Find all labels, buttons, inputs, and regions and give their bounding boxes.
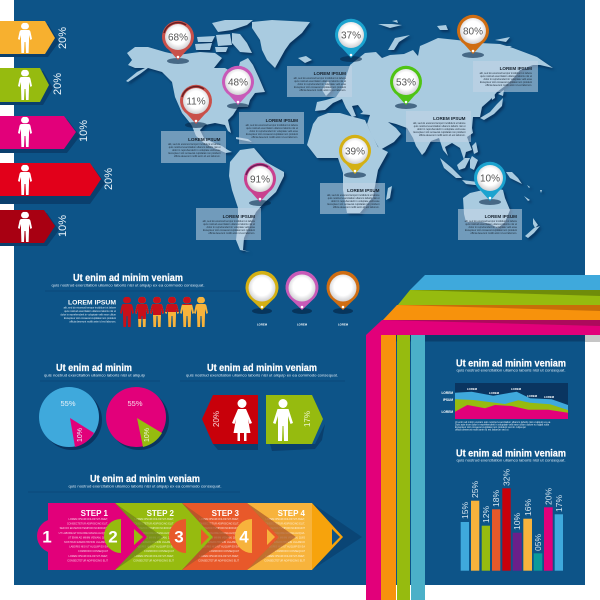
- pie: magenta: [106, 387, 169, 450]
- panel: steps: [28, 474, 362, 570]
- step 4: [247, 503, 362, 570]
- step 2: LOREM IPSUM DOLOR SIT AMET,: [134, 555, 174, 558]
- North America: [126, 47, 265, 153]
- pie: blue: 55%: [60, 399, 76, 408]
- New Zealand: [525, 218, 540, 238]
- ribbon: orange: [381, 305, 600, 600]
- arrow: green 20%: 20%: [52, 73, 64, 95]
- Southeast Asia islands: [440, 142, 484, 186]
- bars: 25%: [470, 481, 480, 498]
- pin: 11%: [180, 85, 212, 128]
- label box: South America: [196, 208, 261, 240]
- chart caption: [455, 421, 551, 432]
- step 1: UT LABORE ET DOLORE MAGNA ALIQUA.: [59, 532, 108, 535]
- heading: Ut enim ad minim veniam: [207, 363, 317, 374]
- step 3: LABORIS NISI UT ALIQUIP EX EA: [200, 546, 239, 549]
- label box: Australia: LOREM IPSUM: [485, 214, 517, 219]
- label box: South America: dolor in reprehenderit in voluptate velit esse: [207, 226, 256, 229]
- Australia: [463, 186, 510, 228]
- tag: male: [266, 395, 325, 451]
- Madagascar: [386, 186, 392, 200]
- text block: officia deserunt mollit anim id est laborum.: [69, 320, 116, 324]
- heading: quis nostrud exercitation ullamco laboris nisi ut consequat.: [456, 368, 566, 372]
- label box: Africa: alit, sed do eiusmod tempor incididunt ut labore: [327, 194, 380, 197]
- heading: quis nostrud exercitation ullamco laboris nisi ut aliquip ex ea commodo consequat.: [186, 374, 338, 378]
- step 3: SED DO EIUSMOD TEMPOR INCIDIDUNT: [191, 527, 239, 530]
- step 3: CONSECTETUR ADIPISICING ELIT: [198, 559, 239, 562]
- chart axis labels: LOREM: [441, 410, 453, 414]
- label box: Africa: officia deserunt mollit anim id est laborum.: [333, 206, 380, 209]
- pin: 39%: [339, 135, 371, 178]
- heading: [52, 273, 205, 288]
- chart caption: Duis aute irure dolor in reprehenderit in voluptate velit esse cillum dolore eu fugiat nulla: [455, 424, 550, 426]
- label box: Russia: dolor in reprehenderit in voluptate velit esse: [484, 78, 533, 81]
- bars: [460, 469, 564, 571]
- label box: Atlantic: quis nostrud exercitation ullamco laboris nisi ut: [246, 127, 298, 130]
- step 3: COMMODO CONSEQUAT: [209, 550, 239, 553]
- label box: Russia: officia deserunt mollit anim id est laborum.: [485, 84, 532, 87]
- panel: gender tags: [180, 363, 345, 451]
- heading: Ut enim ad minim veniam: [456, 448, 566, 460]
- step 4: LABORIS NISI UT ALIQUIP EX EA: [266, 546, 305, 549]
- heading: Ut enim ad minim veniam: [73, 273, 183, 284]
- panel: empty pins: [246, 271, 360, 326]
- label box: Atlantic: [239, 112, 304, 144]
- label box: Australia: dolor in reprehenderit in voluptate velit esse: [469, 226, 518, 229]
- text block: [61, 300, 117, 324]
- label box: Atlantic: LOREM IPSUM: [266, 118, 298, 123]
- arrow: dark red 10%: 10%: [57, 215, 69, 237]
- step 4: CONSECTETUR ADIPISICING ELIT,: [264, 523, 305, 526]
- label box: Europe: quis nostrud exercitation ullamco laboris nisi ut: [294, 80, 346, 83]
- label box: South America: alit, sed do eiusmod tempor incididunt ut labore: [203, 220, 256, 223]
- label box: North America: alit, sed do eiusmod tempor incididunt ut labore: [168, 143, 221, 146]
- bars: 20%: [544, 488, 554, 505]
- pin: pink: LOREM: [297, 322, 308, 326]
- label box: South America: Excepteur sint occaecat cupidatat non proident: [203, 229, 255, 232]
- label box: Australia: Excepteur sint occaecat cupidatat non proident: [465, 229, 517, 232]
- pin: 68%: 68%: [168, 32, 188, 44]
- pin: orange: LOREM: [338, 322, 349, 326]
- area chart: LOREM: [527, 394, 538, 398]
- label box: Asia: LOREM IPSUM: [433, 116, 466, 121]
- label box: Africa: Excepteur sint occaecat cupidatat non proident: [328, 203, 380, 206]
- label box: North America: [161, 131, 226, 163]
- label box: Russia: Excepteur sint occaecat cupidatat non proident: [480, 81, 532, 84]
- pin: 48%: [222, 66, 254, 109]
- ribbons: [366, 275, 600, 600]
- pin: 91%: 91%: [250, 174, 270, 186]
- Baffin Island: [232, 33, 252, 53]
- step 3: LOREM IPSUM DOLOR SIT AMET,: [199, 555, 239, 558]
- step 4: NOSTRUD EXERCITATION ULLAMCO: [261, 541, 305, 544]
- number 3: 3: [174, 528, 184, 546]
- step 1: SED DO EIUSMOD TEMPOR INCIDIDUNT: [60, 527, 108, 530]
- pie: magenta: 55%: [127, 399, 143, 408]
- map label boxes: [161, 61, 538, 240]
- pin: 39%: 39%: [345, 146, 365, 158]
- label box: Europe: LOREM IPSUM: [314, 71, 346, 76]
- label box: South America: officia deserunt mollit anim id est laborum.: [208, 232, 255, 235]
- Arctic island: [216, 34, 232, 46]
- heading: quis nostrud exercitation ullamco laboris nisi ut consequat.: [456, 458, 566, 462]
- label box: Asia: [406, 111, 471, 142]
- grey shadow on white: [585, 335, 600, 342]
- text block: alit, sed do eiusmod tempor incididunt ut labore: [64, 306, 117, 310]
- arrow: orange 20%: [0, 21, 69, 57]
- area chart: LOREM: [489, 391, 500, 395]
- number 4: [235, 519, 252, 553]
- people icons: [120, 297, 208, 327]
- chart caption: Ut enim ad minim veniam quis nostrud exercitation ullamco laboris nisi ut aliquip ex ea: [455, 421, 551, 424]
- number 2: 2: [108, 528, 118, 546]
- step 3: UT ENIM AD MINIM VENIAM, QUIS: [199, 536, 239, 539]
- step 4: LOREM IPSUM DOLOR SIT AMET,: [265, 555, 305, 558]
- pin: 37%: [335, 19, 367, 62]
- heading: [44, 363, 145, 378]
- chart caption: officia deserunt mollit anim id est laborum sed ut: [455, 428, 509, 432]
- text block: LOREM IPSUM: [68, 300, 116, 306]
- Novaya Zemlya: [388, 35, 410, 50]
- Arctic island: [197, 36, 215, 42]
- label box: Australia: alit, sed do eiusmod tempor incididunt ut labore: [465, 220, 518, 223]
- pie: magenta: 10%: [144, 428, 151, 442]
- arrow: orange 20%: 20%: [57, 27, 69, 49]
- label box: Russia: [473, 61, 538, 92]
- step 4: SED DO EIUSMOD TEMPOR INCIDIDUNT: [257, 527, 305, 530]
- label box: South America: LOREM IPSUM: [223, 214, 255, 219]
- step 3: CONSECTETUR ADIPISICING ELIT,: [198, 523, 239, 526]
- step 2: LABORIS NISI UT ALIQUIP EX EA: [135, 546, 174, 549]
- shadow under ribbon: [385, 335, 585, 342]
- label box: Asia: quis nostrud exercitation ullamco laboris nisi ut: [414, 125, 466, 128]
- Ellesmere Island: [212, 20, 253, 32]
- label box: Asia: dolor in reprehenderit in voluptate velit esse: [417, 128, 466, 131]
- step 4: STEP 4: [278, 509, 306, 518]
- label box: Russia: alit, sed do eiusmod tempor incididunt ut labore: [480, 72, 533, 75]
- pin: 11%: 11%: [186, 96, 206, 108]
- label box: North America: Excepteur sint occaecat cupidatat non proident: [169, 152, 221, 155]
- Cuba: [236, 137, 252, 142]
- step 2: CONSECTETUR ADIPISICING ELIT,: [133, 523, 174, 526]
- tag: male: 17%: [303, 411, 312, 427]
- bars: 16%: [523, 499, 533, 516]
- ribbon: blue: [410, 275, 600, 600]
- step 1: STEP 1: [81, 509, 109, 518]
- pin: 37%: 37%: [341, 30, 361, 42]
- text block: dolor in reprehenderit in voluptate velit esse cillum: [61, 314, 116, 316]
- pie: blue: [39, 387, 102, 450]
- ribbon: green: [397, 290, 600, 600]
- pin: 53%: 53%: [396, 78, 416, 88]
- step 1: COMMODO CONSEQUAT: [78, 550, 108, 553]
- label box: Europe: dolor in reprehenderit in voluptate velit esse: [298, 83, 347, 86]
- panel: pie charts: [39, 363, 169, 450]
- tag: female: 20%: [212, 411, 221, 427]
- Arctic island: [195, 43, 212, 50]
- panel: bar chart: [456, 448, 566, 571]
- label box: Asia: officia deserunt mollit anim id est laborum.: [419, 134, 466, 137]
- step 1: NOSTRUD EXERCITATION ULLAMCO: [64, 541, 108, 544]
- Arctic island: [215, 47, 228, 52]
- label box: Africa: dolor in reprehenderit in voluptate velit esse: [331, 200, 380, 203]
- step 4: CONSECTETUR ADIPISICING ELIT: [264, 559, 305, 562]
- area chart: LOREM: [544, 395, 555, 399]
- chart axis labels: IPSUM: [443, 398, 453, 402]
- heading: quis nostrud exercitation ullamco laboris nisi ut aliquip ex ea commodo consequat.: [68, 484, 222, 488]
- map pins: [162, 15, 506, 206]
- pin: 80%: [457, 15, 489, 58]
- Africa: [307, 113, 388, 213]
- heading: [68, 474, 222, 488]
- pin: 68%: [162, 21, 194, 64]
- step 1: LABORIS NISI UT ALIQUIP EX EA: [69, 546, 108, 549]
- step 3: [182, 503, 296, 570]
- step 2: STEP 2: [147, 509, 175, 518]
- label box: Europe: Excepteur sint occaecat cupidatat non proident: [294, 86, 346, 89]
- chart axis labels: LOREM: [441, 391, 453, 395]
- pin: 91%: [244, 163, 276, 206]
- step 4: UT LABORE ET DOLORE MAGNA ALIQUA.: [256, 532, 305, 535]
- label box: Africa: [320, 183, 385, 214]
- area chart: LOREM: [511, 387, 522, 391]
- step 2: COMMODO CONSEQUAT: [144, 550, 174, 553]
- step 1: [48, 503, 163, 570]
- label box: Africa: quis nostrud exercitation ullamco laboris nisi ut: [328, 197, 380, 200]
- heading: quis nostrud exercitation ullamco laboris nisi ut aliquip ex ea commodo consequat.: [52, 284, 205, 288]
- step 3: UT LABORE ET DOLORE MAGNA ALIQUA.: [190, 532, 239, 535]
- step 1: LOREM IPSUM DOLOR SIT AMET,: [68, 518, 108, 521]
- label box: Africa: LOREM IPSUM: [347, 188, 380, 193]
- pie: blue: 10%: [77, 428, 84, 442]
- step 2: UT ENIM AD MINIM VENIAM, QUIS: [134, 536, 174, 539]
- area chart: [455, 383, 568, 419]
- arrow: dark red 10%: [0, 210, 69, 246]
- step 2: SED DO EIUSMOD TEMPOR INCIDIDUNT: [126, 527, 174, 530]
- step 3: NOSTRUD EXERCITATION ULLAMCO: [195, 541, 239, 544]
- label box: Europe: officia deserunt mollit anim id est laborum.: [299, 89, 346, 92]
- arrow: green 20%: [0, 68, 64, 105]
- step 2: LOREM IPSUM DOLOR SIT AMET,: [134, 518, 174, 521]
- label box: North America: officia deserunt mollit anim id est laborum.: [174, 155, 221, 158]
- heading: [186, 363, 338, 378]
- step 1: CONSECTETUR ADIPISICING ELIT: [67, 559, 108, 562]
- label box: Asia: alit, sed do eiusmod tempor incididunt ut labore: [413, 122, 466, 125]
- step 4: LOREM IPSUM DOLOR SIT AMET,: [265, 518, 305, 521]
- bars: 05%: [533, 534, 543, 551]
- number 4: 4: [239, 528, 249, 546]
- label box: North America: LOREM IPSUM: [188, 137, 221, 142]
- chart caption: Excepteur sint occaecat cupidatat non proident sunt in culpa qui: [455, 426, 526, 429]
- label box: Atlantic: dolor in reprehenderit in voluptate velit esse: [250, 130, 299, 133]
- tag: female: [202, 395, 258, 450]
- bars: 15%: [460, 502, 470, 519]
- arrow: red 20%: 20%: [103, 168, 115, 190]
- label box: Australia: quis nostrud exercitation ullamco laboris nisi ut: [465, 223, 517, 226]
- Eurasia: [315, 38, 553, 160]
- text block: quis nostrud exercitation ullamco laboris nisi ut: [64, 310, 116, 313]
- number 3: [169, 519, 186, 553]
- bars: 18%: [491, 490, 501, 507]
- step 1: UT ENIM AD MINIM VENIAM, QUIS: [68, 536, 108, 539]
- step 3: STEP 3: [212, 509, 240, 518]
- label box: Russia: LOREM IPSUM: [500, 66, 532, 71]
- label box: North America: quis nostrud exercitation ullamco laboris nisi ut: [169, 146, 221, 149]
- area chart: LOREM: [467, 387, 478, 391]
- Britain: [322, 80, 332, 96]
- label box: North America: dolor in reprehenderit in voluptate velit esse: [172, 149, 221, 152]
- arrow: magenta 10%: [0, 116, 90, 153]
- pin: 10%: [474, 162, 506, 205]
- Iceland: [298, 56, 312, 63]
- heading: Ut enim ad minim veniam: [456, 358, 566, 370]
- label box: Asia: Excepteur sint occaecat cupidatat non proident: [414, 131, 466, 134]
- step 1: CONSECTETUR ADIPISICING ELIT,: [67, 523, 108, 526]
- bars: 12%: [481, 506, 491, 523]
- bars: 17%: [554, 495, 564, 512]
- step 2: NOSTRUD EXERCITATION ULLAMCO: [130, 541, 174, 544]
- number 1: [37, 519, 54, 553]
- label box: Atlantic: officia deserunt mollit anim id est laborum.: [251, 136, 298, 139]
- label box: Atlantic: Excepteur sint occaecat cupidatat non proident: [246, 133, 298, 136]
- label box: South America: quis nostrud exercitation ullamco laboris nisi ut: [203, 223, 255, 226]
- panel: left percentage arrows: [0, 21, 115, 246]
- label box: Australia: [458, 209, 522, 240]
- number 2: [104, 519, 121, 553]
- pin: 53%: [390, 66, 422, 109]
- heading: quis nostrud exercitation ullamco laboris nisi ut aliquip: [44, 374, 145, 378]
- pin: 48%: 48%: [228, 78, 248, 88]
- label box: Australia: officia deserunt mollit anim id est laborum.: [470, 232, 517, 235]
- label box: Europe: alit, sed do eiusmod tempor incididunt ut labore: [294, 77, 347, 80]
- step 4: COMMODO CONSEQUAT: [275, 550, 305, 553]
- world map: [126, 20, 553, 252]
- number 1: 1: [42, 528, 52, 546]
- chart axis labels: [441, 391, 453, 414]
- bars: 10%: [512, 513, 522, 530]
- label box: Europe: [287, 66, 352, 97]
- label box: Atlantic: alit, sed do eiusmod tempor incididunt ut labore: [246, 124, 299, 127]
- panel: area chart: [441, 358, 568, 432]
- pin: 80%: 80%: [463, 26, 483, 38]
- step 4: UT ENIM AD MINIM VENIAM, QUIS: [265, 536, 305, 539]
- step 3: LOREM IPSUM DOLOR SIT AMET,: [199, 518, 239, 521]
- step 2: UT LABORE ET DOLORE MAGNA ALIQUA.: [125, 532, 174, 535]
- heading: Ut enim ad minim veniam: [90, 474, 200, 485]
- step 1: LOREM IPSUM DOLOR SIT AMET,: [68, 555, 108, 558]
- Severnaya and Svalbard islands: [378, 20, 512, 49]
- pin: 10%: 10%: [480, 174, 500, 184]
- Japan and Sakhalin: [480, 88, 504, 120]
- arrow: red 20%: [0, 163, 115, 204]
- Greenland: [252, 20, 310, 68]
- ribbon: magenta: [366, 320, 600, 600]
- South America: [229, 148, 284, 252]
- label box: Russia: quis nostrud exercitation ullamco laboris nisi ut: [480, 75, 532, 78]
- text block: Excepteur sint occaecat cupidatat non proident: [64, 317, 116, 320]
- pin: yellow: LOREM: [257, 322, 268, 326]
- New Guinea and Pacific islands: [506, 172, 542, 201]
- heading: Ut enim ad minim: [56, 363, 132, 374]
- step 2: [115, 503, 230, 570]
- panel: people statistic: [45, 273, 240, 327]
- arrow: magenta 10%: 10%: [78, 120, 90, 142]
- step 2: CONSECTETUR ADIPISICING ELIT: [133, 559, 174, 562]
- bars: 32%: [502, 469, 512, 486]
